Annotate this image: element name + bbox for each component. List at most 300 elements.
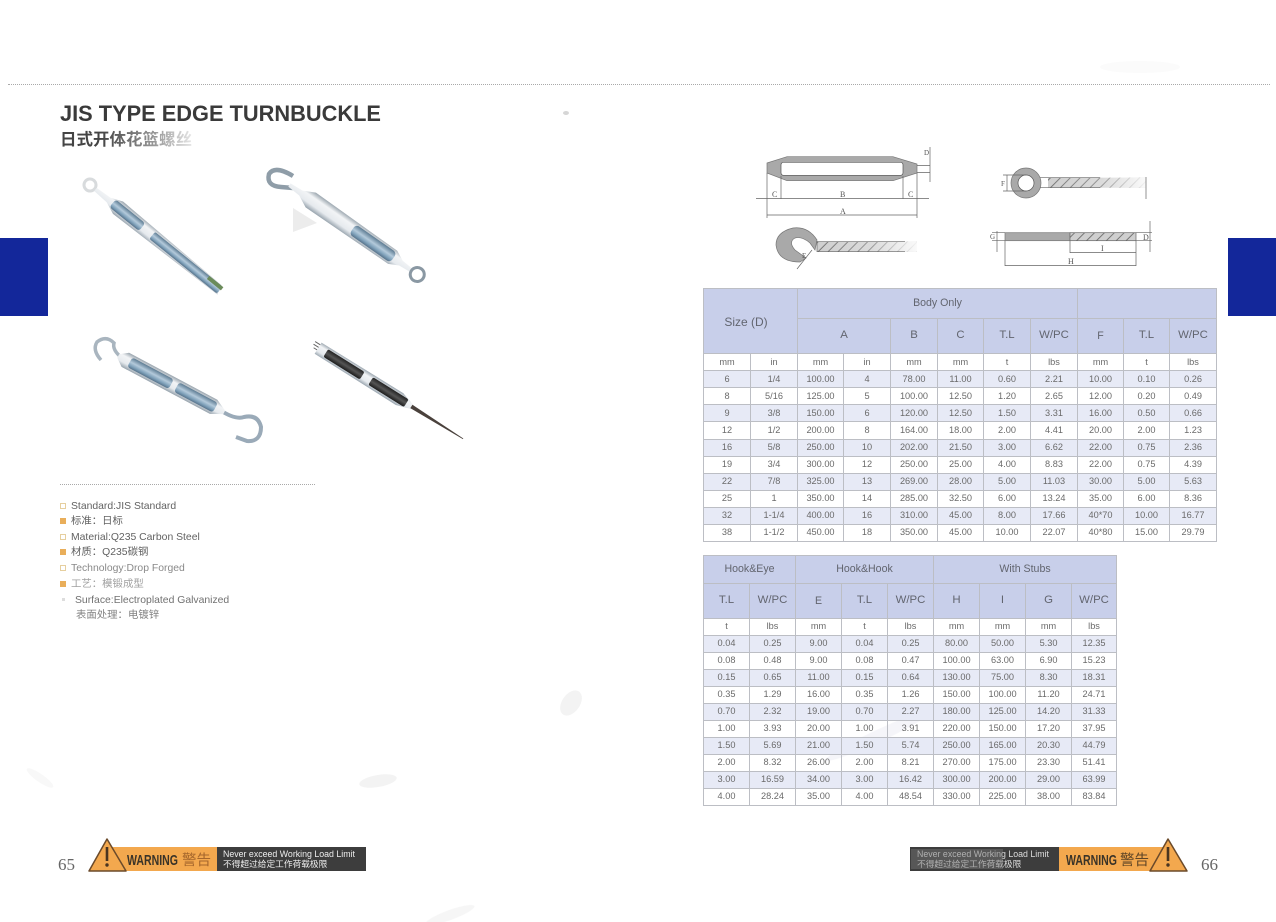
table: body only and eye specifications: 29.79 xyxy=(1182,527,1204,537)
table: hook and eye, hook and hook, with stubs: Hook&Eye xyxy=(724,563,775,575)
table: body only and eye specifications: 2.36 xyxy=(1184,442,1202,452)
table: hook and eye, hook and hook, with stubs: 75.00 xyxy=(991,672,1014,682)
table: body only and eye specifications: 202.00 xyxy=(900,442,928,452)
table: hook and eye, hook and hook, with stubs: 28.24 xyxy=(761,791,784,801)
table: hook and eye, hook and hook, with stubs: 2.27 xyxy=(902,706,919,716)
table: body only and eye specifications: 10 xyxy=(862,442,872,452)
table: hook and eye, hook and hook, with stubs: 0.47 xyxy=(902,655,919,665)
table: body only and eye specifications: 250.00 xyxy=(900,459,928,469)
table: hook and eye, hook and hook, with stubs: 250.00 xyxy=(942,740,971,750)
table: hook and eye, hook and hook, with stubs: 11.20 xyxy=(1037,689,1060,699)
table: hook and eye, hook and hook, with stubs: 9.00 xyxy=(810,655,827,665)
table: hook and eye, hook and hook, with stubs: 12.35 xyxy=(1083,638,1106,648)
table: body only and eye specifications: 3/8 xyxy=(768,408,780,418)
table: body only and eye specifications: 1-1/4 xyxy=(764,510,784,520)
table: body only and eye specifications: 15.00 xyxy=(1135,527,1158,537)
table: body only and eye specifications: 38 xyxy=(722,527,732,537)
right blue side tab xyxy=(1228,238,1276,316)
table: body only and eye specifications: 25 xyxy=(722,493,732,503)
table: body only and eye specifications: mm xyxy=(813,357,828,367)
table: body only and eye specifications: mm xyxy=(906,357,922,367)
table: hook and eye, hook and hook, with stubs: T.L xyxy=(719,594,734,606)
table: hook and eye, hook and hook, with stubs: 2.00 xyxy=(718,757,735,767)
table: hook and eye, hook and hook, with stubs: 20.00 xyxy=(807,723,830,733)
table: hook and eye, hook and hook, with stubs: 20.30 xyxy=(1037,740,1060,750)
text: surface cn: 表面处理：电镀锌 xyxy=(76,610,159,621)
table: hook and eye, hook and hook, with stubs: 37.95 xyxy=(1083,723,1106,733)
table: body only and eye specifications: 200.00 xyxy=(806,425,835,435)
table: hook and eye, hook and hook, with stubs: 0.15 xyxy=(718,672,735,682)
table: hook and eye, hook and hook, with stubs: 31.33 xyxy=(1083,706,1106,716)
table: hook and eye, hook and hook, with stubs: mm xyxy=(949,621,964,631)
table: hook and eye, hook and hook, with stubs: W/PC xyxy=(896,594,925,606)
drawing: turnbuckle body with dimensions: A xyxy=(840,207,846,216)
table: body only and eye specifications: 20.00 xyxy=(1089,425,1112,435)
table: hook and eye, hook and hook, with stubs: 3.91 xyxy=(902,723,919,733)
table: hook and eye, hook and hook, with stubs: 1.50 xyxy=(856,740,873,750)
table: body only and eye specifications: 10.00 xyxy=(1089,374,1112,384)
table: body only and eye specifications: 5.00 xyxy=(1138,476,1155,486)
table: body only and eye specifications: 285.00 xyxy=(900,493,928,503)
table: body only and eye specifications: 16 xyxy=(862,510,872,520)
table: body only and eye specifications: 10.00 xyxy=(996,527,1018,537)
table: body only and eye specifications: 450.00 xyxy=(806,527,835,537)
table: hook and eye, hook and hook, with stubs: 8.30 xyxy=(1040,672,1057,682)
table: body only and eye specifications: Size (D) xyxy=(724,315,768,329)
table: body only and eye specifications: 40*70 xyxy=(1088,510,1112,520)
table: body only and eye specifications: F xyxy=(1097,330,1104,342)
icon: warning triangle xyxy=(1150,839,1187,871)
table: hook and eye, hook and hook, with stubs: 23.30 xyxy=(1037,757,1060,767)
table: hook and eye, hook and hook, with stubs: 5.74 xyxy=(902,740,919,750)
table: body only and eye specifications: 12.00 xyxy=(1089,391,1112,401)
table: body only and eye specifications: 350.00 xyxy=(806,493,835,503)
table: hook and eye, hook and hook, with stubs: 9.00 xyxy=(810,638,827,648)
table: body only and eye specifications: 1.23 xyxy=(1184,425,1202,435)
table: hook and eye, hook and hook, with stubs: I xyxy=(1001,594,1004,606)
table: hook and eye, hook and hook, with stubs: 3.93 xyxy=(764,723,781,733)
table: hook and eye, hook and hook, with stubs: 4.00 xyxy=(718,791,735,801)
table: body only and eye specifications: 35.00 xyxy=(1089,493,1112,503)
table: hook and eye, hook and hook, with stubs: 5.30 xyxy=(1040,638,1057,648)
table: hook and eye, hook and hook, with stubs: 80.00 xyxy=(945,638,968,648)
title: JIS TYPE EDGE TURNBUCKLE xyxy=(60,101,381,126)
table: hook and eye, hook and hook, with stubs: 0.65 xyxy=(764,672,781,682)
page number 66: 66 xyxy=(1201,855,1218,874)
table: hook and eye, hook and hook, with stubs: 330.00 xyxy=(942,791,971,801)
table: hook and eye, hook and hook, with stubs: 63.99 xyxy=(1083,774,1106,784)
table: hook and eye, hook and hook, with stubs: 0.70 xyxy=(856,706,873,716)
table: body only and eye specifications: 310.00 xyxy=(900,510,928,520)
table: body only and eye specifications: 1-1/2 xyxy=(764,527,784,537)
table: hook and eye, hook and hook, with stubs: 2.00 xyxy=(856,757,873,767)
table: body only and eye specifications: T.L xyxy=(999,329,1015,341)
icon: warning triangle xyxy=(89,839,126,871)
table: hook and eye, hook and hook, with stubs: 29.00 xyxy=(1037,774,1060,784)
table: hook and eye, hook and hook, with stubs xyxy=(703,555,1117,806)
table: hook and eye, hook and hook, with stubs: 16.00 xyxy=(807,689,830,699)
table: body only and eye specifications: 13 xyxy=(862,476,872,486)
table: hook and eye, hook and hook, with stubs: 0.70 xyxy=(718,706,735,716)
table: body only and eye specifications: 4 xyxy=(864,374,870,384)
table: body only and eye specifications: 16 xyxy=(722,442,732,452)
table: hook and eye, hook and hook, with stubs: With Stubs xyxy=(999,563,1051,575)
table: hook and eye, hook and hook, with stubs: 0.04 xyxy=(718,638,735,648)
drawing: hook end: E xyxy=(802,252,806,260)
table: body only and eye specifications: 1/4 xyxy=(768,374,780,384)
table: hook and eye, hook and hook, with stubs: 0.48 xyxy=(764,655,781,665)
table: hook and eye, hook and hook, with stubs: 26.00 xyxy=(807,757,830,767)
table: body only and eye specifications: 78.00 xyxy=(902,374,926,384)
text: standard cn: 标准：日标 xyxy=(71,516,123,527)
table: body only and eye specifications: 6.00 xyxy=(1138,493,1155,503)
table: hook and eye, hook and hook, with stubs: 0.08 xyxy=(718,655,735,665)
table: body only and eye specifications: 0.66 xyxy=(1184,408,1202,418)
table: body only and eye specifications: 30.00 xyxy=(1089,476,1112,486)
table: body only and eye specifications: 250.00 xyxy=(806,442,835,452)
turnbuckle: hook and hook xyxy=(95,339,261,441)
warning bar left: Never exceed Working Load Limit xyxy=(223,849,355,859)
text: technology: Technology:Drop Forged xyxy=(71,563,185,574)
table: body only and eye specifications: 0.10 xyxy=(1138,374,1155,384)
table: hook and eye, hook and hook, with stubs: 1.50 xyxy=(718,740,735,750)
table: body only and eye specifications: 1.50 xyxy=(998,408,1016,418)
table: hook and eye, hook and hook, with stubs: 130.00 xyxy=(942,672,971,682)
dotted divider under photos xyxy=(60,484,315,485)
table: body only and eye specifications: 6 xyxy=(864,408,870,418)
table: hook and eye, hook and hook, with stubs: 1.00 xyxy=(856,723,873,733)
table: body only and eye specifications: 164.00 xyxy=(900,425,928,435)
table: body only and eye specifications: 21.50 xyxy=(949,442,972,452)
drawing: turnbuckle body with dimensions: C xyxy=(772,190,777,199)
table: body only and eye specifications: 45.00 xyxy=(949,527,972,537)
table: hook and eye, hook and hook, with stubs: 24.71 xyxy=(1083,689,1106,699)
warning bar left: 不得超过给定工作荷载极限 xyxy=(223,857,328,870)
table: body only and eye specifications: 100.00 xyxy=(900,391,928,401)
table: hook and eye, hook and hook, with stubs: 8.21 xyxy=(902,757,919,767)
drawing: stub end: D xyxy=(1143,233,1149,242)
table: body only and eye specifications: 19 xyxy=(722,459,732,469)
table: hook and eye, hook and hook, with stubs: 35.00 xyxy=(807,791,830,801)
table: body only and eye specifications: mm xyxy=(1093,357,1108,367)
table: hook and eye, hook and hook, with stubs: 19.00 xyxy=(807,706,830,716)
table: body only and eye specifications: 8 xyxy=(724,391,730,401)
table: body only and eye specifications: 100.00 xyxy=(806,374,835,384)
table: body only and eye specifications: 8.00 xyxy=(998,510,1016,520)
drawing: turnbuckle body with dimensions: B xyxy=(840,190,845,199)
table: hook and eye, hook and hook, with stubs: 48.54 xyxy=(899,791,922,801)
table: body only and eye specifications: 9 xyxy=(724,408,730,418)
table: hook and eye, hook and hook, with stubs: t xyxy=(725,621,728,631)
table: hook and eye, hook and hook, with stubs: 0.25 xyxy=(902,638,919,648)
specification list xyxy=(60,501,229,621)
table: body only and eye specifications: 40*80 xyxy=(1088,527,1112,537)
table: hook and eye, hook and hook, with stubs: 21.00 xyxy=(807,740,830,750)
table: body only and eye specifications: B xyxy=(910,329,918,341)
table: body only and eye specifications: 269.00 xyxy=(900,476,928,486)
table: body only and eye specifications: 5.63 xyxy=(1184,476,1202,486)
table: body only and eye specifications: 6.62 xyxy=(1045,442,1063,452)
table: hook and eye, hook and hook, with stubs: 5.69 xyxy=(764,740,781,750)
drawing: stub end: H xyxy=(1068,257,1074,266)
table: body only and eye specifications: 18.00 xyxy=(949,425,972,435)
table: body only and eye specifications: 5/16 xyxy=(765,391,783,401)
table: body only and eye specifications: 2.65 xyxy=(1045,391,1063,401)
drawing: stub end xyxy=(990,221,1152,266)
table: body only and eye specifications: 6.00 xyxy=(998,493,1016,503)
table: body only and eye specifications: 28.00 xyxy=(949,476,972,486)
table: body only and eye specifications: 12.50 xyxy=(949,391,972,401)
table: body only and eye specifications: C xyxy=(956,329,965,341)
table: body only and eye specifications: A xyxy=(840,329,848,341)
table: hook and eye, hook and hook, with stubs: 150.00 xyxy=(988,723,1017,733)
table: body only and eye specifications: 25.00 xyxy=(949,459,972,469)
table: body only and eye specifications: 0.60 xyxy=(998,374,1016,384)
table: hook and eye, hook and hook, with stubs: mm xyxy=(995,621,1010,631)
table: hook and eye, hook and hook, with stubs: 18.31 xyxy=(1083,672,1106,682)
bullet: surface xyxy=(62,598,65,601)
table: body only and eye specifications: 150.00 xyxy=(806,408,835,418)
table: body only and eye specifications: 22.00 xyxy=(1089,442,1112,452)
table: hook and eye, hook and hook, with stubs: t xyxy=(863,621,866,631)
table: body only and eye specifications: 13.24 xyxy=(1042,493,1066,503)
table: hook and eye, hook and hook, with stubs: 34.00 xyxy=(807,774,830,784)
turnbuckle: with stubs xyxy=(309,339,467,445)
table: body only and eye specifications: 14 xyxy=(862,493,872,503)
table: body only and eye specifications: 2.00 xyxy=(998,425,1016,435)
table: hook and eye, hook and hook, with stubs: 3.00 xyxy=(856,774,873,784)
table: body only and eye specifications: 5.00 xyxy=(998,476,1016,486)
table: body only and eye specifications: 350.00 xyxy=(900,527,928,537)
table: body only and eye specifications: 22.07 xyxy=(1042,527,1066,537)
table: hook and eye, hook and hook, with stubs: 51.41 xyxy=(1083,757,1106,767)
table: body only and eye specifications: 0.26 xyxy=(1184,374,1202,384)
table: body only and eye specifications: 45.00 xyxy=(949,510,972,520)
table: hook and eye, hook and hook, with stubs: 125.00 xyxy=(988,706,1017,716)
table: body only and eye specifications: 4.39 xyxy=(1184,459,1202,469)
table: body only and eye specifications: in xyxy=(863,357,871,367)
table: hook and eye, hook and hook, with stubs: 4.00 xyxy=(856,791,873,801)
table: body only and eye specifications: 11.03 xyxy=(1043,476,1065,486)
table: body only and eye specifications: 22.00 xyxy=(1089,459,1112,469)
table: body only and eye specifications: 2.21 xyxy=(1045,374,1063,384)
table: hook and eye, hook and hook, with stubs: 0.35 xyxy=(718,689,735,699)
table: body only and eye specifications: 11.00 xyxy=(949,374,972,384)
table: hook and eye, hook and hook, with stubs: 0.64 xyxy=(902,672,919,682)
table: hook and eye, hook and hook, with stubs: lbs xyxy=(905,621,916,631)
table: body only and eye specifications: 4.41 xyxy=(1045,425,1063,435)
table: hook and eye, hook and hook, with stubs: 180.00 xyxy=(942,706,971,716)
table: body only and eye specifications: 3.31 xyxy=(1045,408,1063,418)
table: hook and eye, hook and hook, with stubs: lbs xyxy=(1088,621,1100,631)
table: body only and eye specifications: 120.00 xyxy=(900,408,928,418)
table: body only and eye specifications: 5/8 xyxy=(768,442,780,452)
table: hook and eye, hook and hook, with stubs: 17.20 xyxy=(1037,723,1060,733)
table: hook and eye, hook and hook, with stubs: 165.00 xyxy=(988,740,1017,750)
warning bar left xyxy=(88,838,366,872)
table: body only and eye specifications: lbs xyxy=(1048,357,1060,367)
table: body only and eye specifications: 1 xyxy=(771,493,777,503)
table: body only and eye specifications: 32 xyxy=(722,510,732,520)
warning bar right: Never exceed Working Load Limit xyxy=(917,849,1049,859)
table: hook and eye, hook and hook, with stubs: mm xyxy=(811,621,826,631)
drawing: turnbuckle body with dimensions: C xyxy=(908,190,913,199)
table: body only and eye specifications: 2.00 xyxy=(1138,425,1155,435)
warning bar left: WARNING xyxy=(127,853,178,869)
table: hook and eye, hook and hook, with stubs: 300.00 xyxy=(942,774,971,784)
table: hook and eye, hook and hook, with stubs: Hook&Hook xyxy=(836,563,893,575)
table: hook and eye, hook and hook, with stubs: 16.59 xyxy=(761,774,784,784)
table: body only and eye specifications xyxy=(703,288,1217,542)
left blue side tab xyxy=(0,238,48,316)
table: hook and eye, hook and hook, with stubs: 270.00 xyxy=(942,757,971,767)
table: body only and eye specifications: 10.00 xyxy=(1135,510,1158,520)
table: hook and eye, hook and hook, with stubs: 63.00 xyxy=(991,655,1014,665)
table: body only and eye specifications: 12.50 xyxy=(949,408,972,418)
table: hook and eye, hook and hook, with stubs: 50.00 xyxy=(991,638,1014,648)
table: body only and eye specifications: 16.77 xyxy=(1182,510,1204,520)
text: material cn: 材质：Q235碳钢 xyxy=(71,547,148,558)
table: hook and eye, hook and hook, with stubs: T.L xyxy=(857,594,872,606)
table: hook and eye, hook and hook, with stubs: 6.90 xyxy=(1040,655,1057,665)
table: body only and eye specifications: 3/4 xyxy=(768,459,780,469)
engineering drawings xyxy=(756,147,1152,270)
table: hook and eye, hook and hook, with stubs: 150.00 xyxy=(942,689,971,699)
drawing: stub end: I xyxy=(1101,244,1104,253)
drawing: turnbuckle body with dimensions xyxy=(756,147,930,218)
table: hook and eye, hook and hook, with stubs: H xyxy=(952,594,961,606)
bullet: technology cn xyxy=(60,581,66,587)
table: body only and eye specifications: 4.00 xyxy=(998,459,1016,469)
table: body only and eye specifications: in xyxy=(770,357,778,367)
table: hook and eye, hook and hook, with stubs: W/PC xyxy=(758,594,787,606)
drawing: hook end xyxy=(776,228,917,269)
table: body only and eye specifications: 1.20 xyxy=(998,391,1016,401)
table: body only and eye specifications: 0.20 xyxy=(1138,391,1155,401)
table: hook and eye, hook and hook, with stubs: 220.00 xyxy=(942,723,971,733)
table: hook and eye, hook and hook, with stubs: 83.84 xyxy=(1083,791,1106,801)
table: body only and eye specifications: 22 xyxy=(722,476,732,486)
table: hook and eye, hook and hook, with stubs: 8.32 xyxy=(764,757,781,767)
bullet: standard cn xyxy=(60,518,66,524)
table: body only and eye specifications: 1/2 xyxy=(768,425,780,435)
table: hook and eye, hook and hook, with stubs: 11.00 xyxy=(807,672,830,682)
table: body only and eye specifications: 8.36 xyxy=(1184,493,1202,503)
table: body only and eye specifications: mm xyxy=(953,357,968,367)
table: body only and eye specifications: 32.50 xyxy=(949,493,972,503)
table: body only and eye specifications: 12 xyxy=(722,425,732,435)
warning bar right xyxy=(910,838,1188,872)
table: body only and eye specifications: t xyxy=(1145,357,1148,367)
table: body only and eye specifications: 125.00 xyxy=(806,391,835,401)
table: body only and eye specifications: 0.75 xyxy=(1138,459,1155,469)
turnbuckle: hook and eye xyxy=(268,170,428,286)
table: hook and eye, hook and hook, with stubs: 100.00 xyxy=(988,689,1017,699)
chinese subtitle: 日式开体花篮螺丝 xyxy=(60,131,192,149)
table: hook and eye, hook and hook, with stubs: W/PC xyxy=(1079,594,1109,606)
table: hook and eye, hook and hook, with stubs: 38.00 xyxy=(1037,791,1060,801)
table: body only and eye specifications: 3.00 xyxy=(998,442,1016,452)
table: body only and eye specifications: 7/8 xyxy=(768,476,780,486)
table: hook and eye, hook and hook, with stubs: 0.04 xyxy=(856,638,873,648)
table: body only and eye specifications: 8.83 xyxy=(1045,459,1063,469)
text: standard: Standard:JIS Standard xyxy=(71,501,176,512)
table: hook and eye, hook and hook, with stubs: 1.26 xyxy=(902,689,919,699)
bullet: technology xyxy=(60,565,66,571)
table: hook and eye, hook and hook, with stubs: 44.79 xyxy=(1083,740,1106,750)
table: hook and eye, hook and hook, with stubs: 0.08 xyxy=(856,655,873,665)
table: hook and eye, hook and hook, with stubs: 1.00 xyxy=(718,723,735,733)
text: technology cn: 工艺：模锻成型 xyxy=(71,579,144,590)
table: body only and eye specifications: 17.66 xyxy=(1042,510,1066,520)
table: body only and eye specifications: 325.00 xyxy=(806,476,835,486)
drawing: turnbuckle body with dimensions: D xyxy=(924,149,929,157)
table: body only and eye specifications: lbs xyxy=(1187,357,1199,367)
table: body only and eye specifications: 12 xyxy=(862,459,872,469)
table: hook and eye, hook and hook, with stubs: E xyxy=(815,595,822,607)
table: body only and eye specifications: Body Only xyxy=(913,297,962,309)
text: material: Material:Q235 Carbon Steel xyxy=(71,532,200,543)
table: body only and eye specifications: 5 xyxy=(864,391,870,401)
table: body only and eye specifications: 6 xyxy=(724,374,730,384)
table: body only and eye specifications: mm xyxy=(719,357,735,367)
bullet: standard xyxy=(60,503,66,509)
turnbuckle: with jaw and open end xyxy=(80,175,226,297)
bullet: material xyxy=(60,534,66,540)
table: body only and eye specifications: 0.50 xyxy=(1138,408,1155,418)
table: body only and eye specifications: W/PC xyxy=(1039,329,1069,341)
warning bar right: 警告 xyxy=(1120,849,1149,870)
drawing: stub end: G xyxy=(990,233,995,241)
table: hook and eye, hook and hook, with stubs: 200.00 xyxy=(988,774,1017,784)
table: body only and eye specifications: 300.00 xyxy=(806,459,835,469)
top dotted divider xyxy=(8,84,1270,85)
table: body only and eye specifications: T.L xyxy=(1139,329,1154,341)
table: hook and eye, hook and hook, with stubs: 100.00 xyxy=(942,655,971,665)
text: surface: Surface:Electroplated Galvanized xyxy=(75,595,229,606)
table: hook and eye, hook and hook, with stubs: 2.32 xyxy=(764,706,781,716)
table: hook and eye, hook and hook, with stubs: 15.23 xyxy=(1083,655,1106,665)
table: hook and eye, hook and hook, with stubs: mm xyxy=(1041,621,1056,631)
table: hook and eye, hook and hook, with stubs: 14.20 xyxy=(1037,706,1060,716)
table: hook and eye, hook and hook, with stubs: 16.42 xyxy=(899,774,922,784)
table: body only and eye specifications: 18 xyxy=(862,527,872,537)
table: body only and eye specifications: 0.49 xyxy=(1184,391,1202,401)
table: hook and eye, hook and hook, with stubs: 0.25 xyxy=(764,638,781,648)
page number 65: 65 xyxy=(58,855,75,874)
table: body only and eye specifications: 16.00 xyxy=(1089,408,1112,418)
warning bar right: 不得超过给定工作荷载极限 xyxy=(917,857,1022,870)
table: hook and eye, hook and hook, with stubs: lbs xyxy=(767,621,778,631)
table: hook and eye, hook and hook, with stubs: G xyxy=(1044,594,1053,606)
table: body only and eye specifications: 0.75 xyxy=(1138,442,1155,452)
table: body only and eye specifications: t xyxy=(1006,357,1008,367)
table: hook and eye, hook and hook, with stubs: 175.00 xyxy=(988,757,1017,767)
table: body only and eye specifications: 8 xyxy=(864,425,870,435)
drawing: eye end xyxy=(1001,168,1146,199)
warning bar left: 警告 xyxy=(182,849,211,870)
bullet: material cn xyxy=(60,549,66,555)
table: hook and eye, hook and hook, with stubs: 0.35 xyxy=(856,689,873,699)
table: hook and eye, hook and hook, with stubs: 1.29 xyxy=(764,689,781,699)
table: body only and eye specifications: W/PC xyxy=(1178,329,1208,341)
table: hook and eye, hook and hook, with stubs: 225.00 xyxy=(988,791,1017,801)
table: hook and eye, hook and hook, with stubs: 3.00 xyxy=(718,774,735,784)
drawing: eye end: F xyxy=(1001,180,1005,188)
product photos: four turnbuckles xyxy=(82,168,464,444)
table: hook and eye, hook and hook, with stubs: 0.15 xyxy=(856,672,873,682)
table: body only and eye specifications: 400.00 xyxy=(806,510,835,520)
